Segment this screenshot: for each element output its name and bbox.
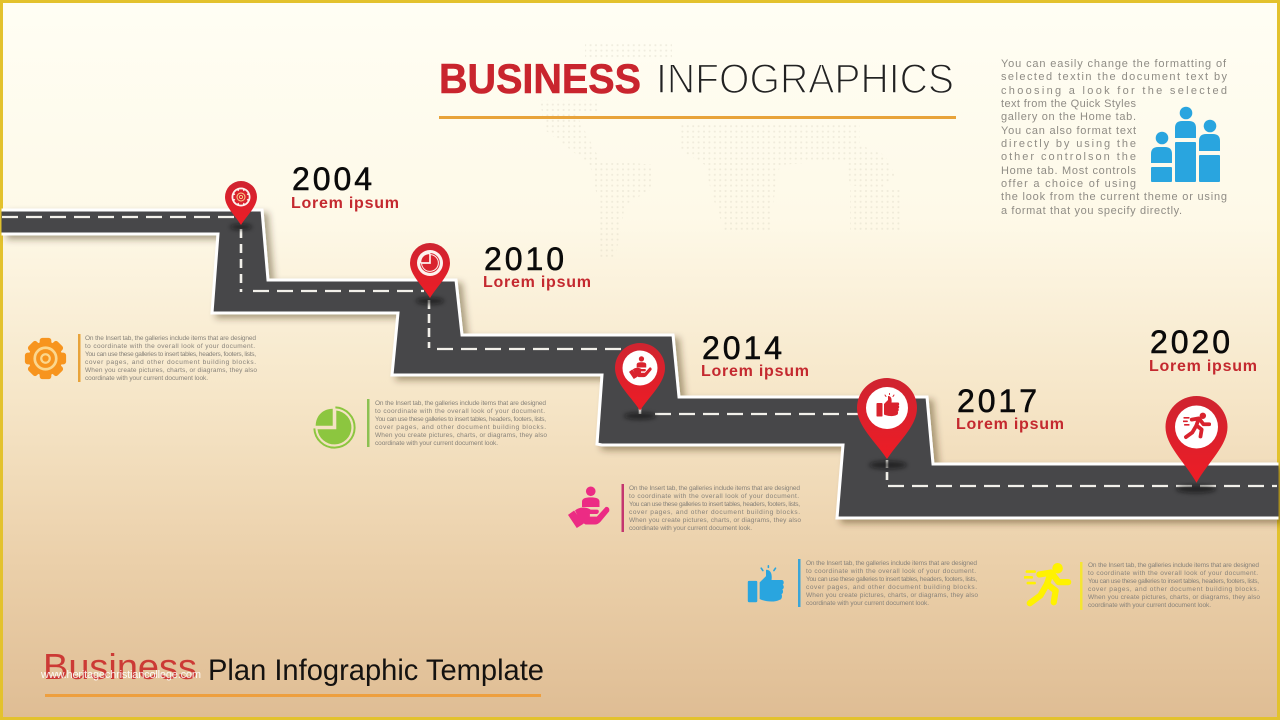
label 2004: 2004 [292,161,372,197]
label 2010: 2010 [484,241,564,277]
icon: runner [1025,563,1068,603]
pin 2004 [225,181,257,230]
label 2010: Lorem ipsum [483,274,591,291]
top-right paragraph: gallery on the Home tab. [1001,111,1136,123]
text block 3: to coordinate with the overall look of your document. [629,493,799,500]
top-right paragraph [1001,58,1228,217]
text block 1: You can use these galleries to insert tables, headers, footers, lists, [85,351,256,358]
icon: hand holding person [568,486,609,528]
text block 2: On the Insert tab, the galleries include items that are designed [375,400,546,407]
text block 1: When you create pictures, charts, or diagrams, they also [85,367,257,374]
accent bar orange [78,334,80,382]
text block 5: coordinate with your current document look. [1088,602,1211,609]
text block 2 [375,400,547,447]
pin 2020 [1166,396,1228,493]
text block 2: to coordinate with the overall look of your document. [375,408,545,415]
accent bar green [367,399,370,447]
text block 1: On the Insert tab, the galleries include items that are designed [85,335,256,342]
label 2020 [1149,324,1257,375]
text block 1 [85,335,257,382]
label 2014: 2014 [702,330,782,366]
text block 3: coordinate with your current document look. [629,525,752,532]
pin 2014 [615,343,665,420]
footer underline [45,694,541,697]
pin 2010 [410,243,450,304]
title: BUSINESS [439,55,641,102]
text block 5: You can use these galleries to insert tables, headers, footers, lists, [1088,578,1259,585]
top-right paragraph: other controlson the [1001,151,1136,163]
text block 4: On the Insert tab, the galleries include items that are designed [806,560,977,567]
text block 3 [629,485,801,532]
title underline [439,116,956,119]
text block 5: When you create pictures, charts, or diagrams, they also [1088,594,1260,601]
top-right paragraph: text from the Quick Styles [1001,98,1136,110]
note 2: pie [314,399,547,448]
title [439,55,954,102]
text block 5: On the Insert tab, the galleries include items that are designed [1088,562,1259,569]
text block 4: cover pages, and other document building blocks. [806,584,977,591]
label 2020: 2020 [1150,324,1230,360]
text block 4: to coordinate with the overall look of your document. [806,568,976,575]
top-right paragraph: offer a choice of using [1001,178,1136,190]
icon: gear [25,338,66,379]
note 5: runner [1025,562,1260,610]
footer heading: Plan Infographic Template [208,654,544,687]
top-right paragraph: selected textin the document text by [1001,71,1228,83]
text block 1: cover pages, and other document building blocks. [85,359,256,366]
top-right paragraph: a format that you specify directly. [1001,205,1182,217]
text block 2: You can use these galleries to insert tables, headers, footers, lists, [375,416,546,423]
text block 3: When you create pictures, charts, or diagrams, they also [629,517,801,524]
accent bar blue [798,559,800,607]
label 2017 [956,383,1064,433]
label 2004 [291,161,399,212]
label 2014: Lorem ipsum [701,363,809,380]
icon: thumbs up [748,566,784,602]
footer heading: Business [43,646,197,687]
label 2010 [483,241,591,291]
text block 4: coordinate with your current document look. [806,600,929,607]
text block 2: coordinate with your current document look. [375,440,498,447]
road [2,210,1277,518]
text block 1: coordinate with your current document look. [85,375,208,382]
icon: pie chart [314,407,355,448]
dotted world map [540,42,900,260]
text block 5: to coordinate with the overall look of your document. [1088,570,1258,577]
note 4: thumb [748,559,978,607]
footer heading [43,646,544,687]
accent bar yellow [1080,562,1082,610]
text block 3: cover pages, and other document building blocks. [629,509,800,516]
icon: people on podium [1151,107,1220,182]
label 2020: Lorem ipsum [1149,358,1257,375]
text block 5: cover pages, and other document building blocks. [1088,586,1259,593]
top-right paragraph: directly by using the [1001,138,1136,150]
text block 2: When you create pictures, charts, or diagrams, they also [375,432,547,439]
text block 1: to coordinate with the overall look of your document. [85,343,255,350]
label 2017: Lorem ipsum [956,416,1064,433]
top-right paragraph: You can easily change the formatting of [1001,58,1227,70]
text block 5 [1088,562,1260,609]
label 2014 [701,330,809,380]
text block 2: cover pages, and other document building blocks. [375,424,546,431]
top-right paragraph: Home tab. Most controls [1001,165,1136,177]
note 3: hand [568,484,801,532]
text block 4 [806,560,978,607]
top-right paragraph: You can also format text [1001,125,1136,137]
top-right paragraph: the look from the current theme or using [1001,191,1227,203]
title: INFOGRAPHICS [656,55,954,102]
top-right paragraph: choosing a look for the selected [1001,85,1227,97]
text block 4: You can use these galleries to insert tables, headers, footers, lists, [806,576,977,583]
text block 4: When you create pictures, charts, or diagrams, they also [806,592,978,599]
text block 3: On the Insert tab, the galleries include items that are designed [629,485,800,492]
note 1: gear [25,334,257,382]
pin 2017 [857,378,917,469]
watermark: www.heritagechristiancollege.com [40,669,201,681]
label 2017: 2017 [957,383,1037,419]
text block 3: You can use these galleries to insert tables, headers, footers, lists, [629,501,800,508]
accent bar magenta [622,484,624,532]
label 2004: Lorem ipsum [291,195,399,212]
